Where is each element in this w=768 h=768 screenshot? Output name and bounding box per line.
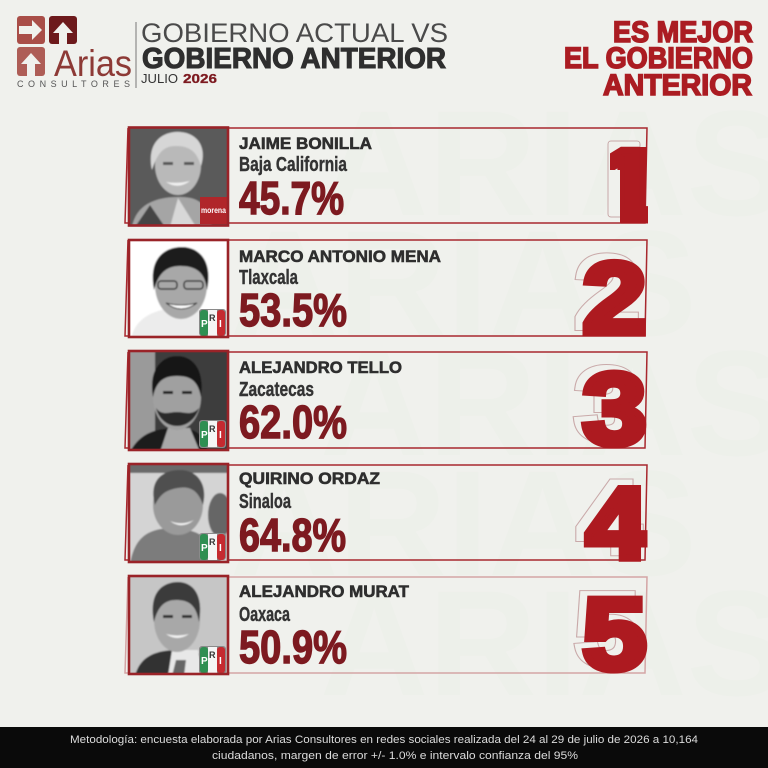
rank number 5: 5 <box>575 574 639 686</box>
logo: morena <box>200 197 227 224</box>
panel: rank 1 Jaime Bonilla <box>124 126 648 227</box>
rank number 1: 1 <box>596 130 656 242</box>
logo: PRI: I <box>219 430 222 441</box>
rank number 4: 4 <box>586 468 648 580</box>
title: GOBIERNO ACTUAL VS <box>141 18 448 48</box>
rank number 5: 5 <box>582 579 646 691</box>
state: Baja California <box>239 154 348 176</box>
rank number 2: 2 <box>582 243 646 355</box>
heading: es mejor el gobierno anterior <box>564 16 753 102</box>
rank number 4: 4 <box>578 462 640 574</box>
state: Oaxaca <box>239 604 291 626</box>
state: Sinaloa <box>239 491 292 513</box>
name: JAIME BONILLA <box>239 134 372 153</box>
rank number 1 <box>608 140 648 224</box>
icon: arrow right square <box>17 16 45 44</box>
panel: rank 3 Alejandro Tello <box>124 350 648 452</box>
panel: rank 5 Alejandro Murat <box>124 574 648 676</box>
infographic: ARIAS <box>230 439 697 607</box>
footer: methodology: ciudadanos, margen de error +/- 1.0% e intervalo confianza del 95% <box>212 750 578 762</box>
rank number 3: 3 <box>575 349 639 461</box>
rank number 5 <box>573 590 648 674</box>
rank number 3 <box>572 364 646 448</box>
logo: PRI: R <box>209 424 216 434</box>
heading: es mejor el gobierno anterior: ANTERIOR <box>603 69 752 102</box>
logo: PRI <box>199 420 226 448</box>
state: Tlaxcala <box>239 267 299 289</box>
photo: Alejandro Murat <box>130 577 227 673</box>
panel: rank 4 Quirino Ordaz <box>124 462 648 564</box>
name: ALEJANDRO TELLO <box>239 358 402 377</box>
photo: Alejandro Tello <box>130 352 227 449</box>
name: MARCO ANTONIO MENA <box>239 247 441 266</box>
title <box>141 18 448 86</box>
photo: Quirino Ordaz <box>130 465 227 561</box>
logo: PRI: I <box>219 656 222 667</box>
rank number 3: 3 <box>575 349 639 461</box>
state: Zacatecas <box>239 379 314 401</box>
rank number 2: 2 <box>575 237 639 349</box>
logo: Arias Consultores: CONSULTORES <box>17 79 130 89</box>
panel: rank 2 Marco Antonio Mena <box>124 238 648 338</box>
logo: PRI: P <box>201 543 208 554</box>
logo: Arias Consultores <box>17 16 132 89</box>
icon: arrow up dark square <box>49 16 77 44</box>
logo: PRI: P <box>201 430 208 441</box>
name: QUIRINO ORDAZ <box>239 469 380 488</box>
heading: es mejor el gobierno anterior: ES MEJOR <box>613 16 753 49</box>
infographic: ARIAS <box>230 199 697 367</box>
rank number 4: 4 <box>578 462 640 574</box>
logo: PRI <box>199 646 226 674</box>
logo: Arias Consultores: Arias <box>54 43 132 84</box>
rank number 2 <box>574 252 646 336</box>
logo: PRI: P <box>201 319 208 330</box>
rank number 4 <box>575 478 648 562</box>
logo: PRI: P <box>201 656 208 667</box>
logo: PRI: I <box>219 319 222 330</box>
name: ALEJANDRO MURAT <box>239 582 410 601</box>
heading: es mejor el gobierno anterior: EL GOBIERNO <box>564 42 753 75</box>
logo: PRI: R <box>209 650 216 660</box>
percentage: 53.5% <box>239 284 347 336</box>
percentage: 62.0% <box>239 396 347 448</box>
percentage: 50.9% <box>239 621 347 673</box>
percentage: 64.8% <box>239 509 346 561</box>
logo: PRI <box>199 309 226 336</box>
title: JULIO <box>141 72 178 86</box>
rank number 5: 5 <box>575 574 639 686</box>
icon: arrow up square <box>17 47 45 76</box>
logo: PRI <box>199 533 226 560</box>
logo: PRI: R <box>209 537 216 547</box>
logo: morena: morena <box>201 205 226 215</box>
logo: PRI: R <box>209 313 216 323</box>
logo: PRI: I <box>219 543 222 554</box>
photo: Jaime Bonilla <box>130 128 227 224</box>
photo: Marco Antonio Mena <box>130 242 227 336</box>
percentage: 45.7% <box>239 172 344 224</box>
footer: methodology <box>0 727 768 768</box>
rank number 3: 3 <box>582 354 646 466</box>
title: 2026 <box>183 71 217 86</box>
footer: methodology: Metodología: encuesta elaborada por Arias Consultores en redes sociales realizada del 24 al 29 de julio de 2026 a 10,164 <box>70 734 698 746</box>
rank number 2: 2 <box>575 237 639 349</box>
title: GOBIERNO ANTERIOR <box>142 43 446 75</box>
